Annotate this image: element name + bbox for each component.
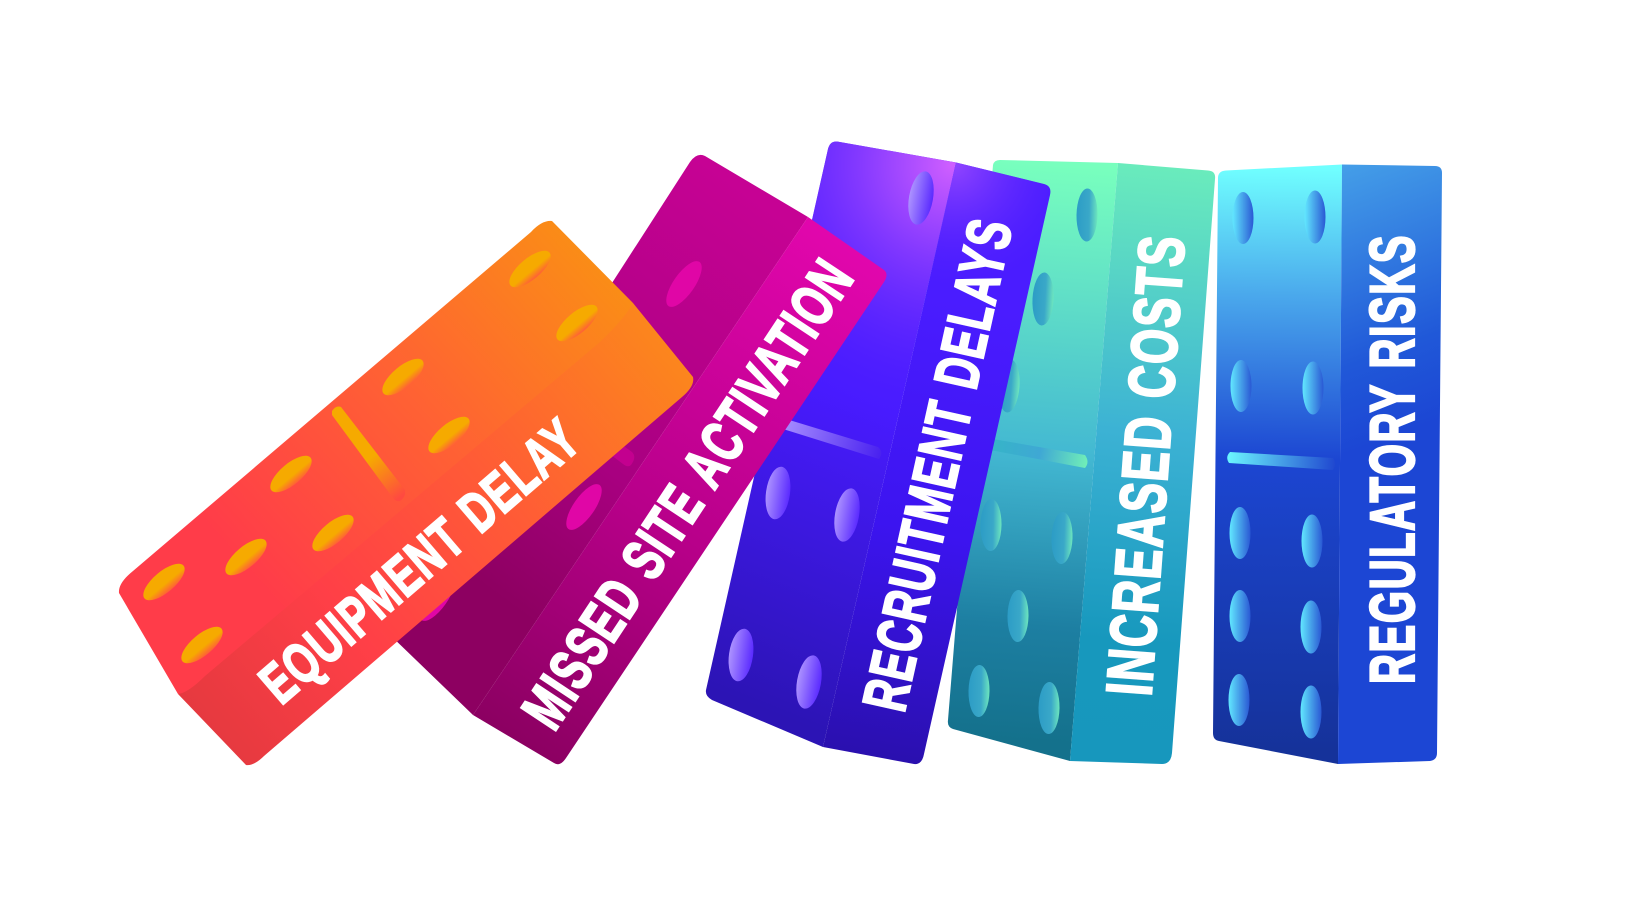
glow: recruitment delays face [706, 141, 956, 747]
label: equipment delay: EQUIPMENT DELAY [248, 406, 593, 716]
pips: equipment delay [138, 245, 603, 669]
face: regulatory risks [1213, 164, 1342, 764]
domino: increased costs [948, 160, 1215, 764]
pips: recruitment delays [725, 169, 938, 711]
side: missed site activation [473, 217, 886, 764]
face: recruitment delays [706, 141, 956, 747]
side: equipment delay [178, 303, 693, 765]
pips: regulatory risks [1228, 190, 1326, 738]
face: equipment delay [119, 221, 633, 694]
divider: equipment delay [332, 406, 405, 501]
divider: regulatory risks [1227, 452, 1335, 470]
label: missed site activation: MISSED SITE ACTIVATION [509, 247, 867, 740]
domino: recruitment delays [706, 141, 1050, 764]
side: recruitment delays [823, 162, 1050, 764]
face: increased costs [948, 160, 1118, 761]
domino: equipment delay [119, 221, 693, 765]
side: increased costs [1070, 163, 1215, 764]
pips: increased costs [968, 188, 1098, 734]
glow: recruitment delays side [823, 162, 1050, 764]
divider: recruitment delays [783, 419, 881, 459]
domino: regulatory risks [1213, 164, 1442, 764]
face: missed site activation [387, 155, 808, 715]
divider: increased costs [990, 439, 1088, 468]
divider: missed site activation [525, 378, 634, 466]
side: regulatory risks [1338, 164, 1442, 764]
domino: missed site activation [387, 155, 886, 764]
label: regulatory risks: REGULATORY RISKS [1358, 234, 1428, 684]
pips: missed site activation [413, 256, 708, 626]
label: increased costs: INCREASED COSTS [1092, 232, 1199, 698]
